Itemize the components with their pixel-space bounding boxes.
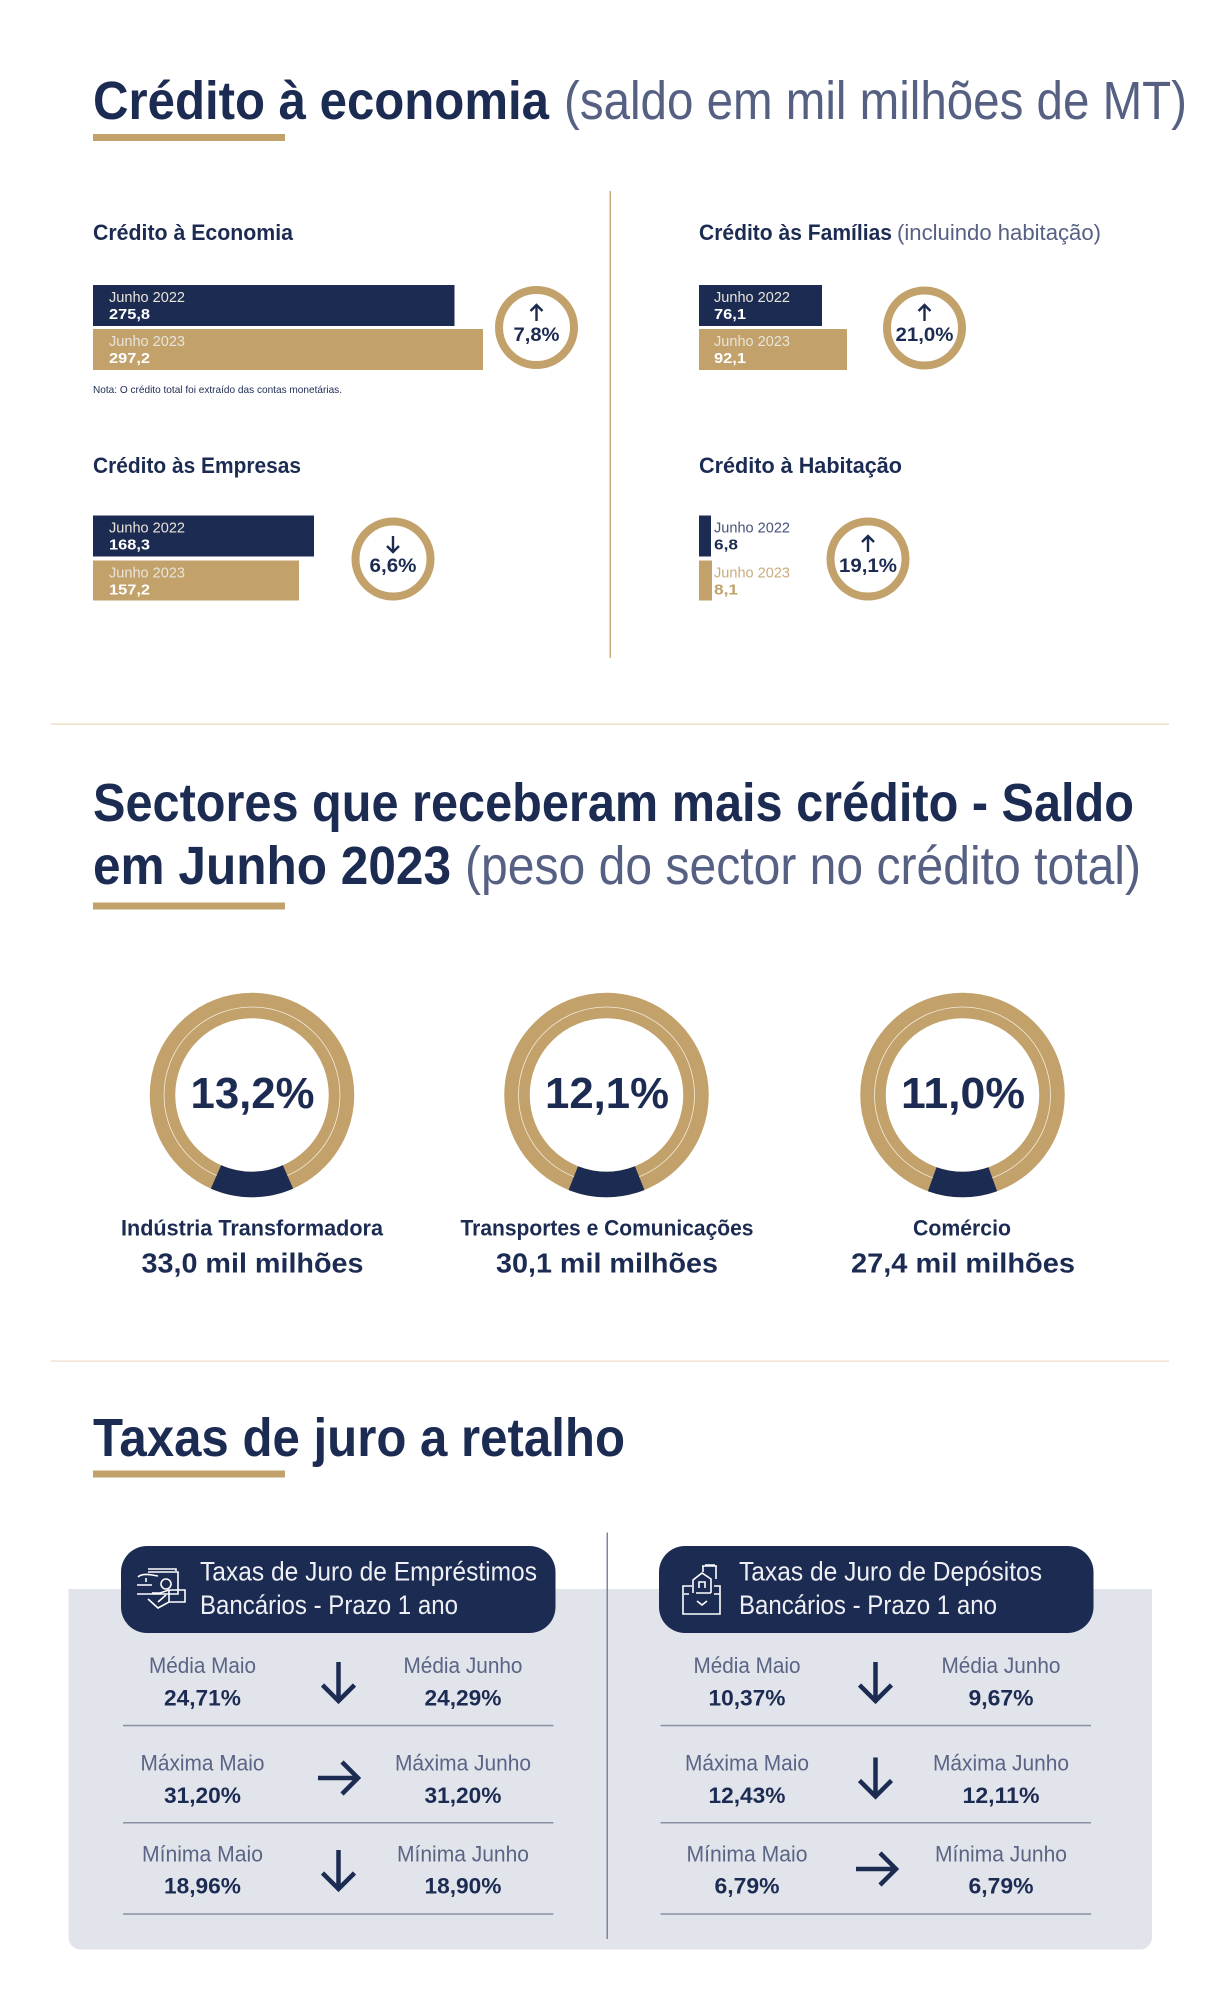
panel: Crédito à Economia: Junho 2023 xyxy=(109,334,185,350)
row: mínima: 6,79% xyxy=(714,1874,780,1898)
chart: Comércio 11,0%: 11,0% xyxy=(901,1069,1025,1118)
row: mínima: 6,79% xyxy=(968,1874,1034,1898)
panel: Crédito às Famílias: 92,1 xyxy=(714,351,746,367)
chart: Comércio 11,0%: 27,4 mil milhões xyxy=(851,1248,1075,1278)
heading: Sectores que receberam mais crédito: Sectores que receberam mais crédito - Saldo xyxy=(93,773,1134,833)
badge: +21,0%: 21,0% xyxy=(896,325,954,346)
panel: Crédito às Famílias: Junho 2022 xyxy=(714,290,790,306)
chart: Transportes e Comunicações 12,1% xyxy=(460,1006,754,1278)
row: mínima: Mínima Maio xyxy=(686,1842,808,1866)
row: mínima xyxy=(123,1842,554,1915)
panel: Crédito às Famílias: Crédito às Famílias xyxy=(699,220,892,245)
row: máxima: Máxima Junho xyxy=(933,1750,1069,1776)
row: mínima: Mínima Junho xyxy=(935,1842,1067,1866)
panel: Crédito às Famílias: 76,1 xyxy=(714,307,746,323)
chart: Transportes e Comunicações 12,1%: 30,1 mil milhões xyxy=(496,1248,718,1278)
panel: Crédito às Empresas: Junho 2022 xyxy=(109,520,185,536)
panel: Crédito às Empresas: Crédito às Empresas xyxy=(93,453,301,478)
heading: Sectores que receberam mais crédito: em Junho 2023 xyxy=(93,836,451,896)
panel: Taxas de Juro de Empréstimos: Bancários - Prazo 1 ano xyxy=(200,1590,458,1620)
panel: Crédito à Economia: 297,2 xyxy=(109,351,150,367)
badge: -6,6% xyxy=(356,522,430,596)
row: média xyxy=(660,1653,1091,1726)
row: mínima: 18,90% xyxy=(424,1874,502,1898)
row: mínima: Mínima Junho xyxy=(397,1842,529,1866)
row: mínima: 18,96% xyxy=(164,1874,241,1898)
badge: +21,0% xyxy=(887,290,962,366)
panel: Crédito às Empresas: Junho 2023 xyxy=(109,566,185,582)
icon: money in hand xyxy=(137,1569,185,1608)
row: média: Média Junho xyxy=(404,1653,522,1678)
panel: Crédito às Famílias xyxy=(699,220,1101,370)
panel: Taxas de Juro de Depósitos: Bancários - Prazo 1 ano xyxy=(739,1590,997,1620)
panel: Crédito às Famílias: Junho 2023 xyxy=(714,334,790,350)
row: média: 9,67% xyxy=(968,1686,1034,1710)
row: média: Média Maio xyxy=(694,1653,800,1678)
chart: Comércio 11,0%: Comércio xyxy=(913,1216,1011,1240)
chart: Transportes e Comunicações 12,1%: 12,1% xyxy=(545,1069,669,1118)
row: máxima: 31,20% xyxy=(424,1783,502,1808)
panel: Crédito à Habitação: Junho 2023 xyxy=(714,566,790,582)
row: máxima xyxy=(660,1750,1091,1824)
panel: Crédito à Economia: Junho 2022 xyxy=(109,290,185,306)
panel: Crédito às Empresas xyxy=(93,453,430,600)
row: máxima: 12,11% xyxy=(962,1783,1040,1808)
row: mínima: Mínima Maio xyxy=(142,1842,263,1866)
row: média: Média Junho xyxy=(942,1653,1060,1678)
panel: Crédito à Habitação: Junho 2022 xyxy=(714,520,790,536)
row: máxima: Máxima Junho xyxy=(395,1750,531,1776)
panel: Crédito à Economia: 275,8 xyxy=(109,307,150,323)
badge: +19,1% xyxy=(830,522,906,596)
badge: +7,8% xyxy=(499,290,574,365)
heading: Sectores que receberam mais crédito xyxy=(93,773,1141,910)
badge: +7,8%: 7,8% xyxy=(514,325,560,346)
row: mínima xyxy=(660,1842,1091,1915)
panel: Crédito às Famílias: (incluindo habitação) xyxy=(897,220,1101,245)
panel: Taxas de Juro de Depósitos xyxy=(659,1546,1094,1915)
badge: +19,1%: 19,1% xyxy=(839,556,897,577)
panel: Crédito à Economia: Crédito à Economia xyxy=(93,220,294,245)
badge: -6,6%: 6,6% xyxy=(370,556,417,577)
chart: Indústria Transformadora 13,2%: 13,2% xyxy=(190,1069,314,1118)
heading: Sectores que receberam mais crédito: (peso do sector no crédito total) xyxy=(465,836,1141,896)
panel: Crédito à Habitação xyxy=(699,453,906,600)
chart: Transportes e Comunicações 12,1%: Transportes e Comunicações xyxy=(460,1216,754,1240)
row: média: 24,29% xyxy=(424,1686,502,1710)
row: média xyxy=(123,1653,554,1726)
heading: Taxas de juro a retalho: Taxas de juro a retalho xyxy=(93,1408,625,1468)
panel: Crédito à Economia: Nota: O crédito total foi extraído das contas monetárias. xyxy=(93,384,342,396)
row: máxima xyxy=(123,1750,554,1824)
row: máxima: Máxima Maio xyxy=(685,1750,809,1776)
row: média: 24,71% xyxy=(164,1686,241,1710)
panel background xyxy=(68,1589,1152,1950)
row: média: 10,37% xyxy=(708,1686,786,1710)
row: máxima: 12,43% xyxy=(708,1783,786,1808)
panel: Crédito às Empresas: 168,3 xyxy=(109,538,150,554)
panel: Crédito à Economia xyxy=(93,220,574,396)
chart: Indústria Transformadora 13,2%: 33,0 mil milhões xyxy=(142,1248,364,1278)
row: média: Média Maio xyxy=(149,1653,256,1678)
heading: Crédito à economia xyxy=(93,71,1187,141)
chart: Indústria Transformadora 13,2%: Indústria Transformadora xyxy=(121,1216,384,1240)
chart: Indústria Transformadora 13,2% xyxy=(121,1006,384,1278)
panel: Crédito à Habitação: Crédito à Habitação xyxy=(699,453,902,478)
panel: Taxas de Juro de Empréstimos xyxy=(121,1546,556,1915)
panel: Taxas de Juro de Depósitos: Taxas de Juro de Depósitos xyxy=(739,1556,1042,1586)
chart: Comércio 11,0% xyxy=(851,1006,1075,1278)
panel: Crédito à Habitação: 6,8 xyxy=(714,538,738,554)
panel: Crédito às Empresas: 157,2 xyxy=(109,582,150,598)
heading: Crédito à economia: Crédito à economia xyxy=(93,71,550,131)
row: máxima: Máxima Maio xyxy=(140,1750,264,1776)
panel: Taxas de Juro de Empréstimos: Taxas de Juro de Empréstimos xyxy=(200,1556,537,1586)
icon: bank deposit xyxy=(683,1565,720,1614)
row: máxima: 31,20% xyxy=(164,1783,241,1808)
panel: Crédito à Habitação: 8,1 xyxy=(714,582,738,598)
